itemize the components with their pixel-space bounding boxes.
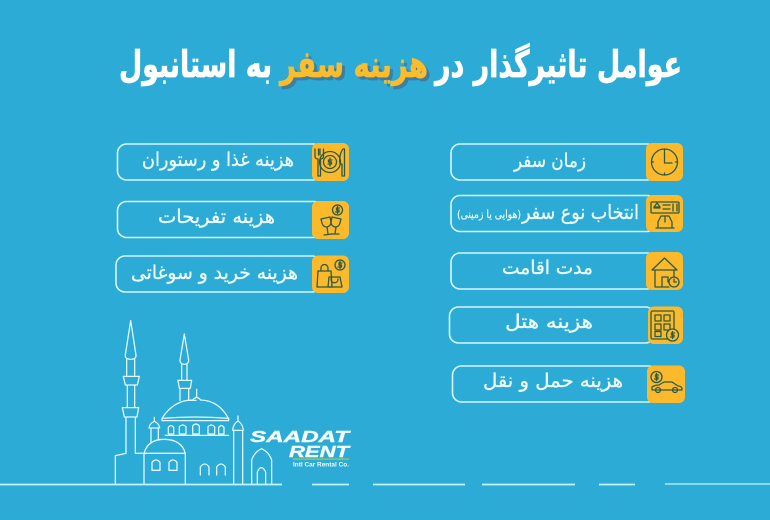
label: travel time: زمان سفر [513,150,586,172]
label: entertainment cost: هزینه تفریحات [158,206,275,228]
panel: food and restaurant cost [118,143,349,181]
panel: transport cost [452,366,685,403]
panel: travel time [451,143,683,181]
icon: hotel building [651,311,678,341]
ground line [0,483,770,486]
label: length of stay: مدت اقامت [502,257,593,279]
label: food and restaurant cost: هزینه غذا و رستوران [142,149,294,171]
panel: travel type [451,195,683,232]
illustration: mosque [115,321,272,484]
icon: plate and cutlery [315,149,344,176]
label: shopping and souvenir cost: هزینه خرید و سوغاتی [131,262,298,284]
logo: Saadat Rent: Intl Car Rental Co. [293,462,349,468]
icon: car with coin [651,372,682,392]
title [119,43,682,89]
panel: hotel cost [450,306,683,344]
icon: glasses with coin [321,205,342,235]
panel: length of stay [451,252,683,290]
label: travel type: انتخاب نوع سفر [521,200,639,224]
icon: shopping bags [317,260,345,287]
title: عوامل تاثیرگذار در [434,43,682,86]
icon: clock [652,149,678,175]
logo: Saadat Rent: RENT [289,444,351,461]
label: hotel cost: هزینه هتل [505,311,593,333]
title: هزینه سفر [282,46,431,89]
panel: shopping and souvenir cost [116,256,349,293]
icon: house and clock [652,258,679,287]
icon: ticket choice [651,202,679,228]
label: transport cost: هزینه حمل و نقل [483,370,623,392]
panel: entertainment cost [118,201,349,239]
logo: Saadat Rent [250,429,351,468]
title: هزینه سفر [279,43,428,86]
logo: Saadat Rent: SAADAT [250,429,351,446]
title: به استانبول [119,43,272,86]
label: air or ground: (هوایی یا زمینی) [457,208,521,221]
